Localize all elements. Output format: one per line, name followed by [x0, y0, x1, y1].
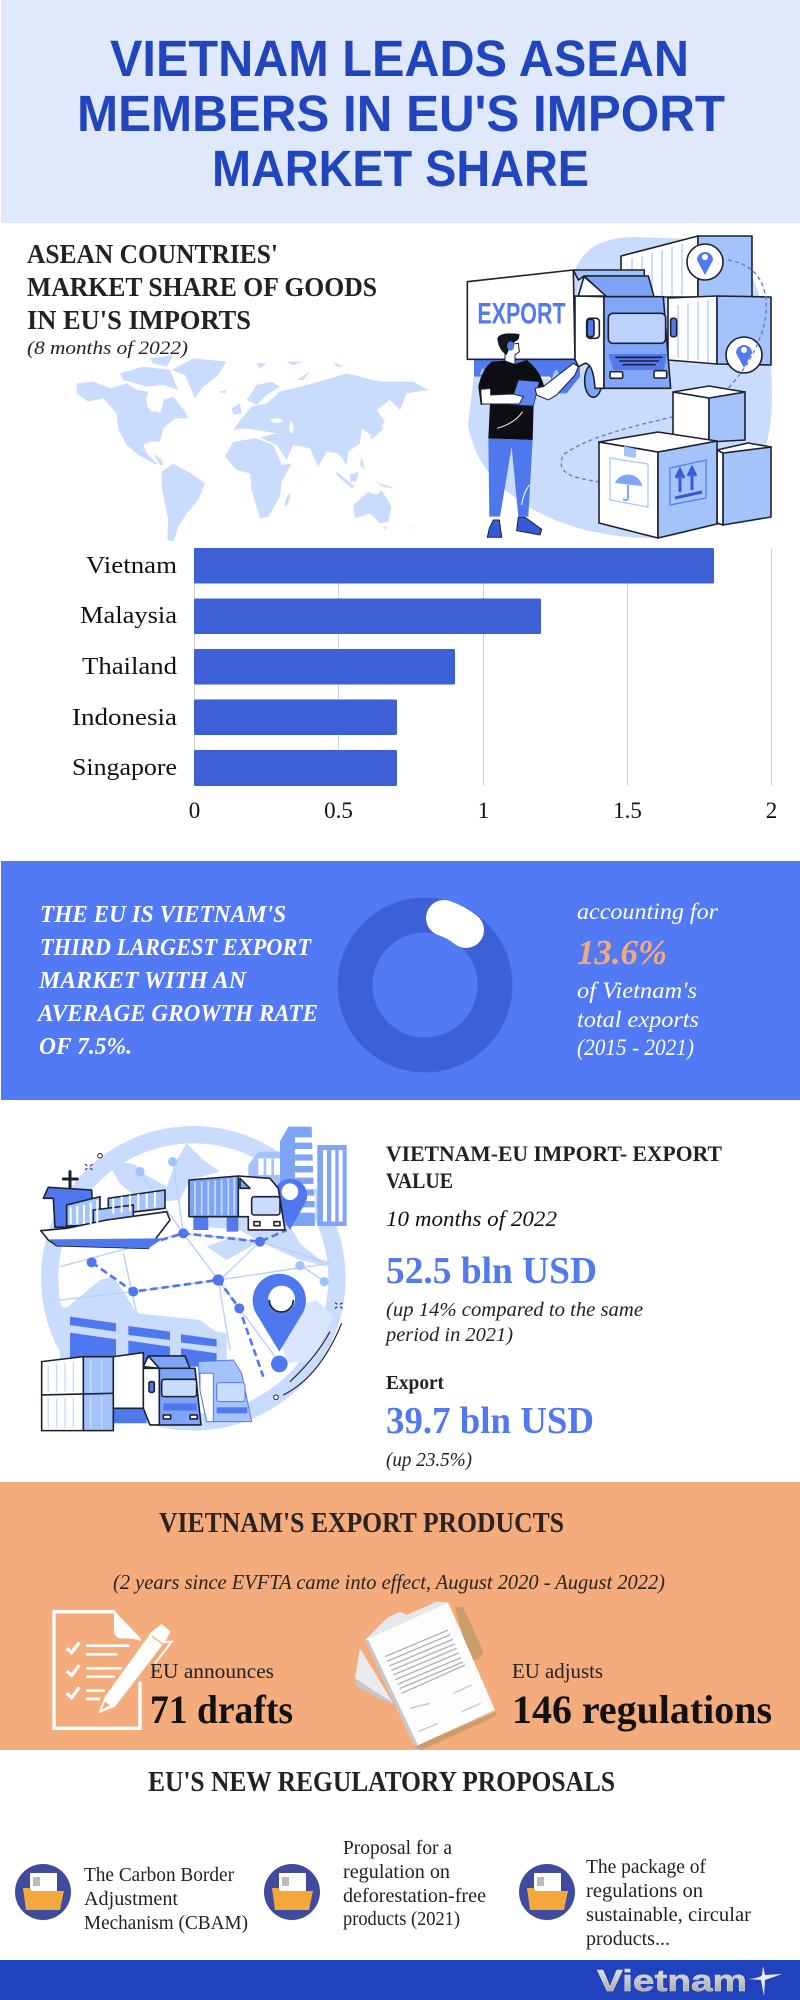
statement text: MARKET WITH AN [38, 968, 248, 994]
warehouse [60, 1307, 227, 1367]
panel: Vietnam's export products: VIETNAM'S EXPORT PRODUCTS [159, 1508, 564, 1539]
bar chart: market share by country: Thailand [82, 654, 177, 680]
share text: accounting for [577, 899, 719, 924]
lower truck 2 [198, 1360, 252, 1422]
statement text [36, 902, 318, 1060]
panel: import-export values: VIETNAM-EU IMPORT- EXPORT [386, 1141, 722, 1166]
proposal: sustainable products: regulations on [586, 1880, 703, 1902]
bar chart: market share by country: 0 [189, 798, 200, 823]
total value: 52.5 bln USD [386, 1250, 597, 1292]
panel: Vietnam's export products: (2 years since EVFTA came into effect, August 2020 - August 2022) [113, 1570, 665, 1594]
bar chart: market share by country: 1.5 [613, 798, 642, 823]
title banner: MARKET SHARE [212, 140, 589, 197]
truck [467, 270, 677, 397]
panel heading: market share [27, 239, 377, 359]
share text: total exports [577, 1007, 699, 1032]
statement text: THE EU IS VIETNAM'S [40, 902, 286, 928]
bar chart: market share by country: 1 [478, 798, 489, 823]
title banner: VIETNAM LEADS ASEAN [110, 30, 689, 87]
panel heading: market share: IN EU'S IMPORTS [27, 305, 251, 335]
proposal: CBAM: The Carbon Border [84, 1864, 234, 1886]
stat: regulations [512, 1659, 772, 1732]
world map background [77, 355, 428, 542]
illustration: export truck, man and boxes [467, 236, 772, 538]
stat: regulations: EU adjusts [512, 1659, 603, 1683]
stat: regulations: 146 regulations [512, 1687, 772, 1732]
icon: stack of documents [355, 1602, 497, 1750]
icon: checklist and pen [54, 1611, 172, 1728]
panel: import-export values: 10 months of 2022 [386, 1206, 557, 1231]
upper container [621, 236, 771, 365]
panel: import-export values [384, 1141, 722, 1471]
proposal: deforestation-free products: regulation on [343, 1861, 450, 1883]
ship [41, 1172, 170, 1248]
stat: drafts: 71 drafts [150, 1687, 293, 1732]
panel heading: market share: ASEAN COUNTRIES' [27, 239, 278, 269]
proposal: CBAM: Adjustment [84, 1888, 178, 1910]
footer with Vietnam+ logo: Vietnam [597, 1963, 747, 1998]
panel heading: market share: (8 months of 2022) [27, 338, 188, 359]
truck: EXPORT [477, 297, 566, 330]
proposal: deforestation-free products: deforestation-free [343, 1885, 486, 1907]
share text: 13.6% [577, 933, 667, 972]
footer with Vietnam+ logo [0, 1960, 800, 2000]
icon: folder [519, 1864, 575, 1920]
panel: Vietnam's export products [0, 1482, 800, 1750]
share text [577, 899, 719, 1060]
panel: import-export values: Export [386, 1372, 444, 1394]
city [248, 1152, 287, 1226]
bar chart: market share by country: Malaysia [80, 603, 177, 629]
proposal: sustainable products: The package of [586, 1856, 706, 1878]
stat: drafts: EU announces [150, 1659, 274, 1683]
statement text: THIRD LARGEST EXPORT [40, 935, 312, 961]
statement text: AVERAGE GROWTH RATE [36, 1001, 318, 1027]
proposal: CBAM [15, 1864, 248, 1934]
map pins [687, 244, 723, 280]
heading: new regulatory proposals: EU'S NEW REGULATORY PROPOSALS [148, 1767, 615, 1798]
containers and lower truck 1 [113, 1408, 147, 1423]
proposal: sustainable products: products... [586, 1928, 670, 1950]
upper truck [193, 1217, 238, 1232]
panel heading: market share: MARKET SHARE OF GOODS [27, 272, 377, 302]
proposal: sustainable products: sustainable, circular [586, 1904, 751, 1926]
proposal: CBAM: Mechanism (CBAM) [84, 1912, 248, 1934]
bar chart: market share by country [72, 548, 777, 823]
statement text: OF 7.5%. [39, 1034, 132, 1060]
export value: 39.7 bln USD [386, 1400, 594, 1442]
panel: import-export values: period in 2021) [384, 1324, 513, 1346]
title banner: MEMBERS IN EU'S IMPORT [77, 85, 725, 142]
bar chart: market share by country: 0.5 [324, 798, 353, 823]
share text: of Vietnam's [577, 978, 697, 1003]
title banner [1, 0, 800, 223]
bar chart: market share by country: Indonesia [72, 705, 177, 731]
bar chart: market share by country: 2 [766, 798, 777, 823]
proposal: deforestation-free products: Proposal for a [343, 1837, 452, 1859]
proposal: deforestation-free products [264, 1837, 486, 1930]
big pin [253, 1274, 306, 1352]
boxes [599, 386, 771, 538]
proposal: sustainable products [519, 1856, 751, 1950]
panel: import-export values: (up 23.5%) [386, 1449, 472, 1471]
icon: folder [264, 1864, 320, 1920]
bar chart: market share by country: Vietnam [86, 553, 177, 579]
icon: folder [15, 1864, 71, 1920]
donut chart [355, 915, 495, 1055]
share text: (2015 - 2021) [577, 1035, 694, 1060]
man [478, 333, 578, 537]
illustration: global logistics globe [41, 1126, 347, 1431]
proposal: deforestation-free products: products (2021) [343, 1908, 460, 1930]
stat: drafts [150, 1659, 293, 1732]
bar chart: market share by country: Singapore [72, 755, 177, 781]
route [92, 1230, 287, 1377]
panel: import-export values: VALUE [386, 1168, 453, 1193]
panel: third largest export market [1, 861, 800, 1100]
panel: import-export values: (up 14% compared to the same [386, 1299, 643, 1321]
